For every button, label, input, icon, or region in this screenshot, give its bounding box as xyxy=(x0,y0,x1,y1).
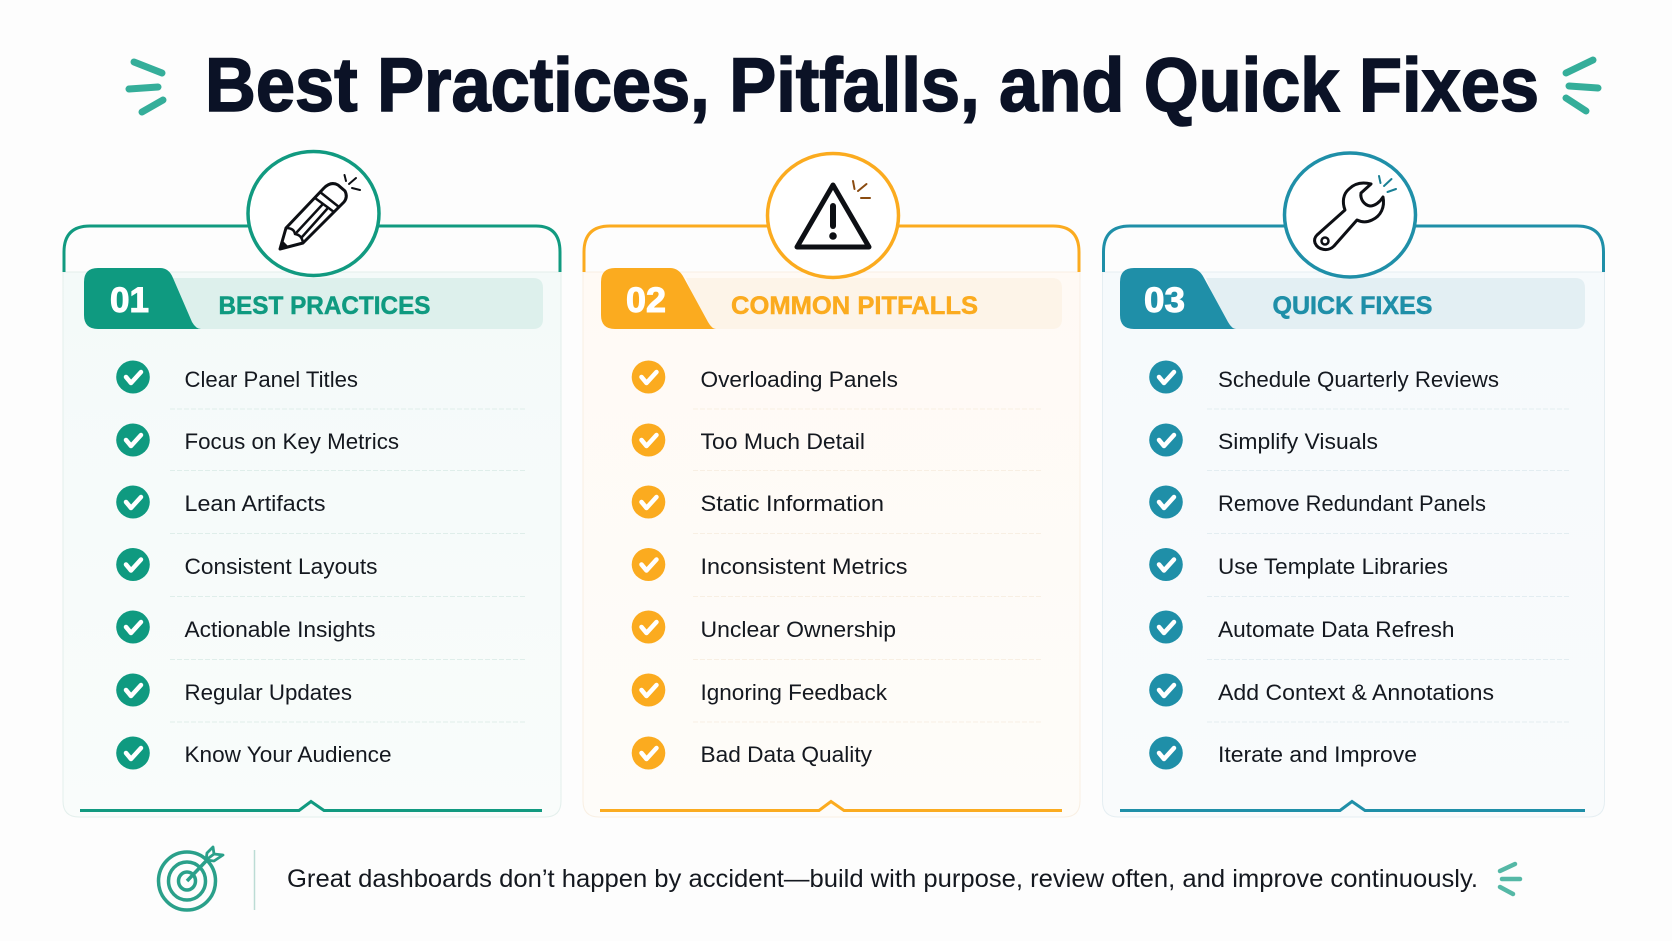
heading banner xyxy=(84,268,543,329)
heading banner xyxy=(601,268,1062,329)
list: best practices items xyxy=(116,360,526,770)
list: best practices items: Clear Panel Titles xyxy=(184,367,358,392)
icon: footer sparks xyxy=(1500,864,1520,894)
list: best practices items: Focus on Key Metrics xyxy=(184,429,399,454)
heading banner: BEST PRACTICES xyxy=(218,292,430,320)
list: best practices items: Know Your Audience xyxy=(184,742,392,767)
card top border xyxy=(64,226,560,272)
heading banner: 01 xyxy=(110,281,149,320)
card body xyxy=(583,272,1080,817)
list: quick fixes items: Use Template Libraries xyxy=(1218,554,1448,579)
list: quick fixes items: Iterate and Improve xyxy=(1218,742,1417,767)
icon: warning badge xyxy=(768,154,898,278)
list: quick fixes items: Remove Redundant Panels xyxy=(1218,491,1486,516)
heading banner: QUICK FIXES xyxy=(1272,292,1432,320)
list: common pitfalls items xyxy=(632,360,1043,770)
list: common pitfalls items: Unclear Ownership xyxy=(700,617,896,642)
list: common pitfalls items: Ignoring Feedback xyxy=(700,680,888,705)
list: common pitfalls items: Bad Data Quality xyxy=(700,742,872,767)
title: Best Practices, Pitfalls, and Quick Fixes xyxy=(205,43,1539,128)
list: common pitfalls items: Static Information xyxy=(700,491,884,516)
icon: left title sparks xyxy=(129,62,163,112)
icon: pencil badge xyxy=(248,152,379,276)
card top border xyxy=(584,226,1079,272)
heading banner xyxy=(1120,268,1585,329)
list: quick fixes items: Automate Data Refresh xyxy=(1218,617,1454,642)
footer divider xyxy=(254,850,256,910)
heading banner: COMMON PITFALLS xyxy=(731,292,978,320)
heading banner: 03 xyxy=(1144,281,1185,320)
panel: common pitfalls xyxy=(583,154,1080,817)
list: best practices items: Regular Updates xyxy=(184,680,352,705)
list: quick fixes items xyxy=(1149,360,1569,770)
card body xyxy=(1102,272,1604,817)
list: best practices items: Lean Artifacts xyxy=(184,491,326,516)
icon: target with arrow xyxy=(158,847,223,910)
list: best practices items: Consistent Layouts xyxy=(184,554,378,579)
list: common pitfalls items: Overloading Panels xyxy=(700,367,898,392)
bottom accent line xyxy=(600,802,1062,810)
panel: quick fixes xyxy=(1102,153,1604,817)
panel: best practices xyxy=(63,152,561,817)
list: quick fixes items: Add Context & Annotations xyxy=(1218,680,1494,705)
list: common pitfalls items: Too Much Detail xyxy=(700,429,865,454)
card body xyxy=(63,272,561,817)
card top border xyxy=(1104,226,1604,272)
bottom accent line xyxy=(80,802,542,810)
list: common pitfalls items: Inconsistent Metrics xyxy=(700,554,908,579)
list: quick fixes items: Schedule Quarterly Reviews xyxy=(1218,367,1499,392)
icon: right title sparks xyxy=(1566,60,1598,111)
heading banner: 02 xyxy=(626,281,666,320)
footer message: Great dashboards don’t happen by accident—build with purpose, review often, and improve continuously. xyxy=(287,865,1478,893)
bottom accent line xyxy=(1120,802,1585,810)
list: quick fixes items: Simplify Visuals xyxy=(1218,429,1378,454)
list: best practices items: Actionable Insights xyxy=(184,617,376,642)
icon: wrench badge xyxy=(1284,153,1416,277)
